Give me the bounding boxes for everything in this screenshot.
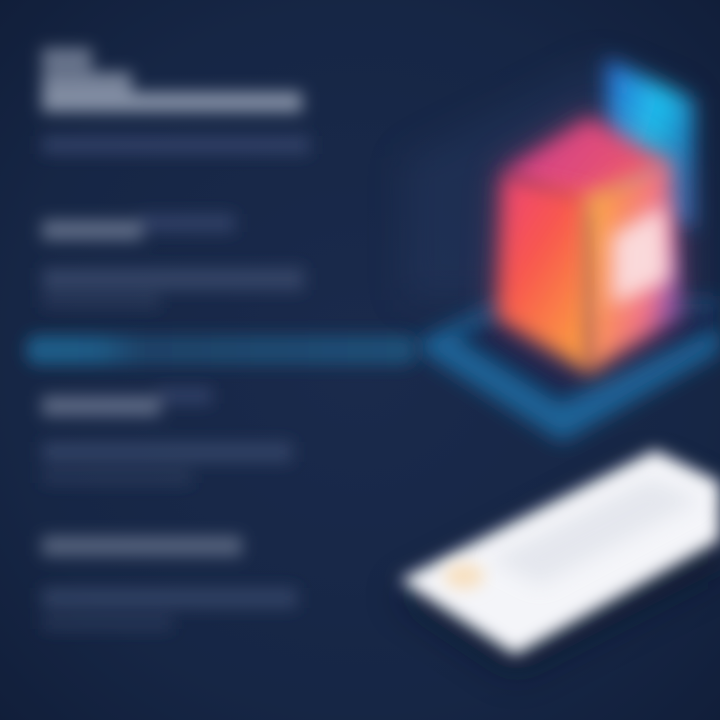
text block: section three [42,536,297,630]
card shadow [395,465,720,675]
cube right face [586,160,680,372]
text block: section one [42,214,304,308]
outline frame behind cube [405,62,690,300]
cube left face [498,175,590,372]
card inner stripe [490,478,700,585]
cube glow [495,115,680,375]
text block: section two [42,388,292,484]
cube top face [505,118,668,212]
card orange accent [444,563,484,589]
cube highlight [612,205,670,305]
white card [400,450,720,655]
icon: gradient cube [495,115,680,375]
icon: blue panel [606,58,694,230]
card body [400,450,720,655]
heading block: title [42,48,310,154]
platform: isometric base [412,300,720,442]
connector line [26,335,416,365]
